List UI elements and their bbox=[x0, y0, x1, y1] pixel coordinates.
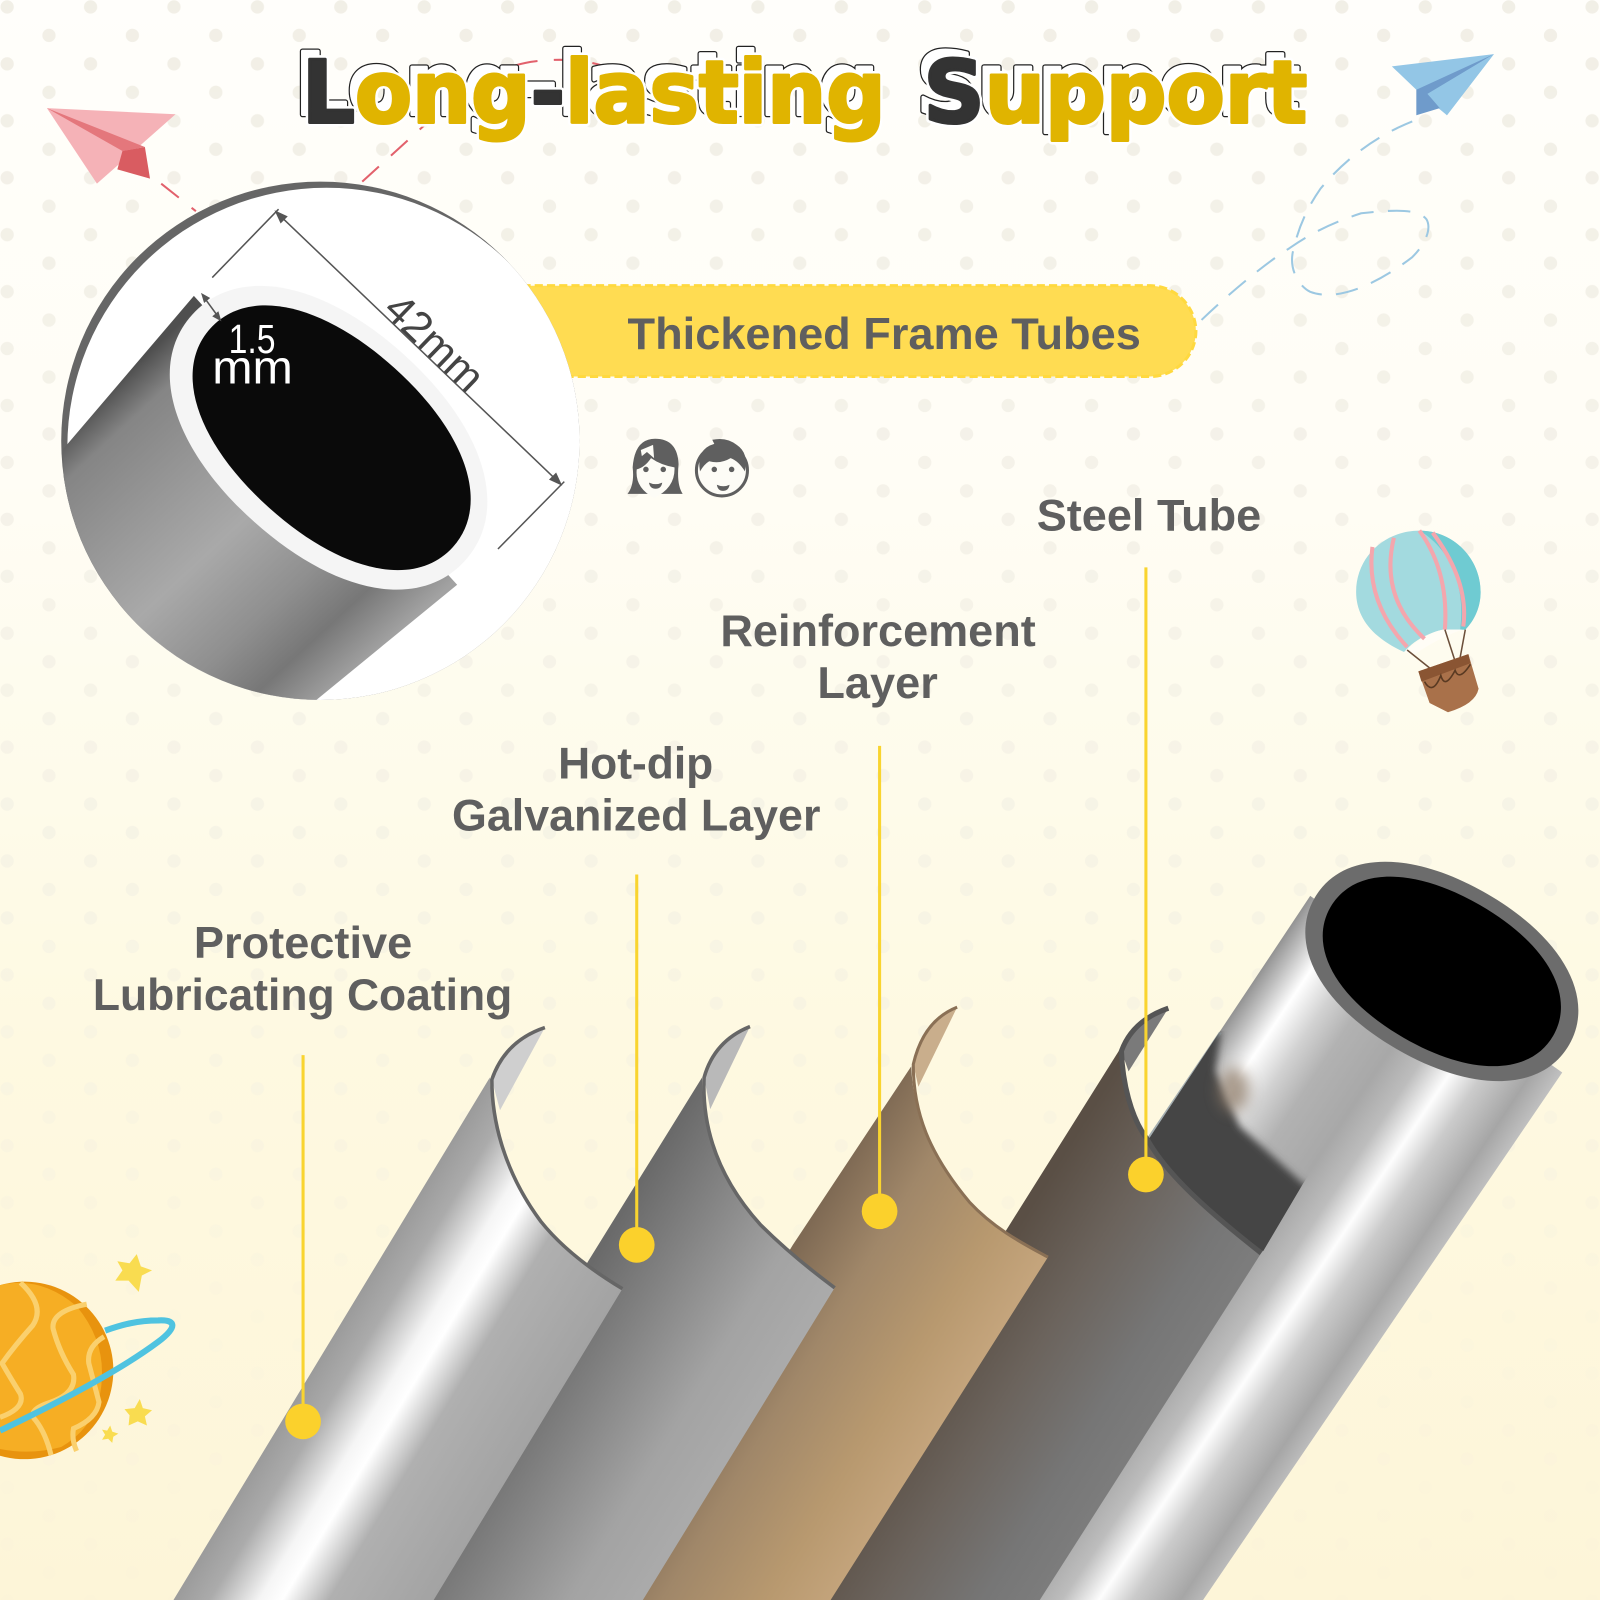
dimension: 1.5mm: 1.5 bbox=[229, 316, 276, 362]
callout: protective lubricating coating bbox=[93, 917, 512, 1439]
icon: planet with ring and stars bbox=[0, 1254, 172, 1459]
dimension: 42mm: 42mm bbox=[375, 284, 494, 402]
layer: reinforcement tan layer bbox=[577, 1007, 1048, 1600]
dimension: 1.5mm bbox=[201, 293, 293, 394]
red dashed flight trail bbox=[161, 60, 612, 211]
exposed notch bbox=[1148, 1031, 1306, 1251]
callout: reinforcement layer bbox=[720, 605, 1036, 1229]
tube body bbox=[63, 286, 487, 700]
callout: protective lubricating coating: Protective bbox=[194, 917, 412, 968]
icon: pink paper plane bbox=[47, 108, 176, 184]
title: Long-lasting bbox=[295, 34, 879, 135]
title: Support bbox=[923, 42, 1307, 143]
main steel tube bbox=[1040, 862, 1578, 1600]
callout: steel tube: Steel Tube bbox=[1037, 490, 1261, 541]
callout: hot-dip galvanized layer: Galvanized Layer bbox=[452, 790, 820, 841]
icon: boy face bbox=[696, 439, 747, 496]
blue dashed flight trail bbox=[1200, 121, 1428, 321]
icon: hot air balloon bbox=[1356, 531, 1481, 712]
title: Long-lasting bbox=[302, 42, 886, 143]
layer: steel tube dark layer bbox=[773, 1008, 1261, 1600]
title bbox=[295, 34, 1307, 143]
title: Support bbox=[916, 34, 1300, 135]
callout: hot-dip galvanized layer: Hot-dip bbox=[558, 738, 713, 789]
banner: thickened frame tubes bbox=[510, 286, 1196, 377]
callout: hot-dip galvanized layer bbox=[452, 738, 820, 1263]
dimension: 42mm bbox=[212, 209, 564, 549]
callout: reinforcement layer: Layer bbox=[817, 657, 938, 708]
layer: protective silver coating bbox=[173, 1028, 622, 1600]
title: Long-lasting bbox=[295, 34, 879, 135]
panel: tube cross-section circle bbox=[61, 182, 586, 706]
callout: steel tube bbox=[1037, 490, 1261, 1192]
dimension: 1.5mm: mm bbox=[212, 342, 293, 394]
title: Long-lasting bbox=[302, 42, 886, 143]
title: Support bbox=[923, 42, 1307, 143]
callout: reinforcement layer: Reinforcement bbox=[720, 605, 1036, 656]
callout: protective lubricating coating: Lubricating Coating bbox=[93, 969, 512, 1020]
layer: hot-dip galvanized gray layer bbox=[383, 1027, 835, 1600]
title: Support bbox=[916, 34, 1300, 135]
icon: girl face bbox=[628, 439, 683, 498]
icon: blue paper plane bbox=[1392, 54, 1494, 115]
banner: thickened frame tubes: Thickened Frame Tubes bbox=[628, 308, 1141, 359]
